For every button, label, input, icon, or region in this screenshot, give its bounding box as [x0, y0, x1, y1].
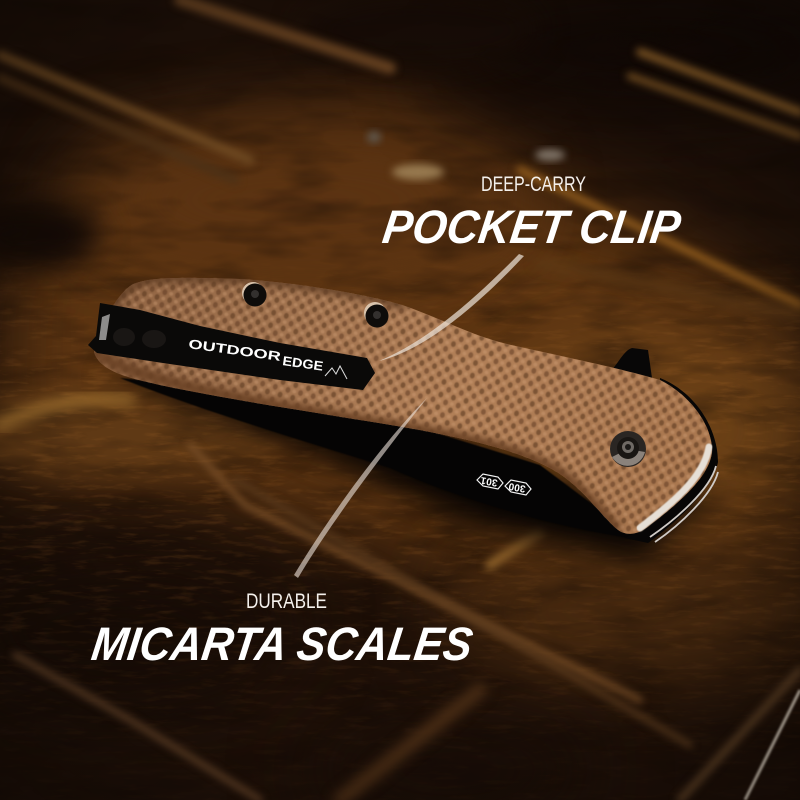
label: deep-carry: DEEP-CARRY — [481, 173, 586, 196]
clip brand logo: OUTDOOR — [188, 336, 283, 364]
callout line: micarta scales — [294, 398, 427, 578]
label: durable: DURABLE — [246, 590, 327, 613]
knife shadow — [100, 375, 725, 560]
clip brand logo: EDGE — [282, 353, 325, 374]
screw — [364, 302, 388, 328]
pivot screw — [610, 431, 646, 467]
handle back edge liners — [625, 378, 718, 543]
blade: black spine below handle — [120, 378, 650, 542]
flipper tab — [612, 348, 652, 378]
pocket clip — [88, 303, 375, 390]
layered liner stripes — [650, 466, 718, 542]
screw — [242, 282, 266, 306]
clip brand logo — [188, 336, 347, 379]
callout line: pocket clip — [379, 254, 524, 361]
scale edge shading — [94, 278, 618, 530]
heading: micarta scales: MICARTA SCALES — [88, 618, 476, 671]
steel stamps 301 300: 300 — [507, 480, 527, 494]
handle scale: micarta — [94, 278, 712, 534]
heading: pocket clip: POCKET CLIP — [379, 201, 684, 254]
steel stamps 301 300: 301 — [479, 474, 499, 488]
bright white edge highlight — [640, 447, 709, 528]
steel stamps 301 300 — [477, 474, 531, 495]
knife — [88, 278, 725, 560]
